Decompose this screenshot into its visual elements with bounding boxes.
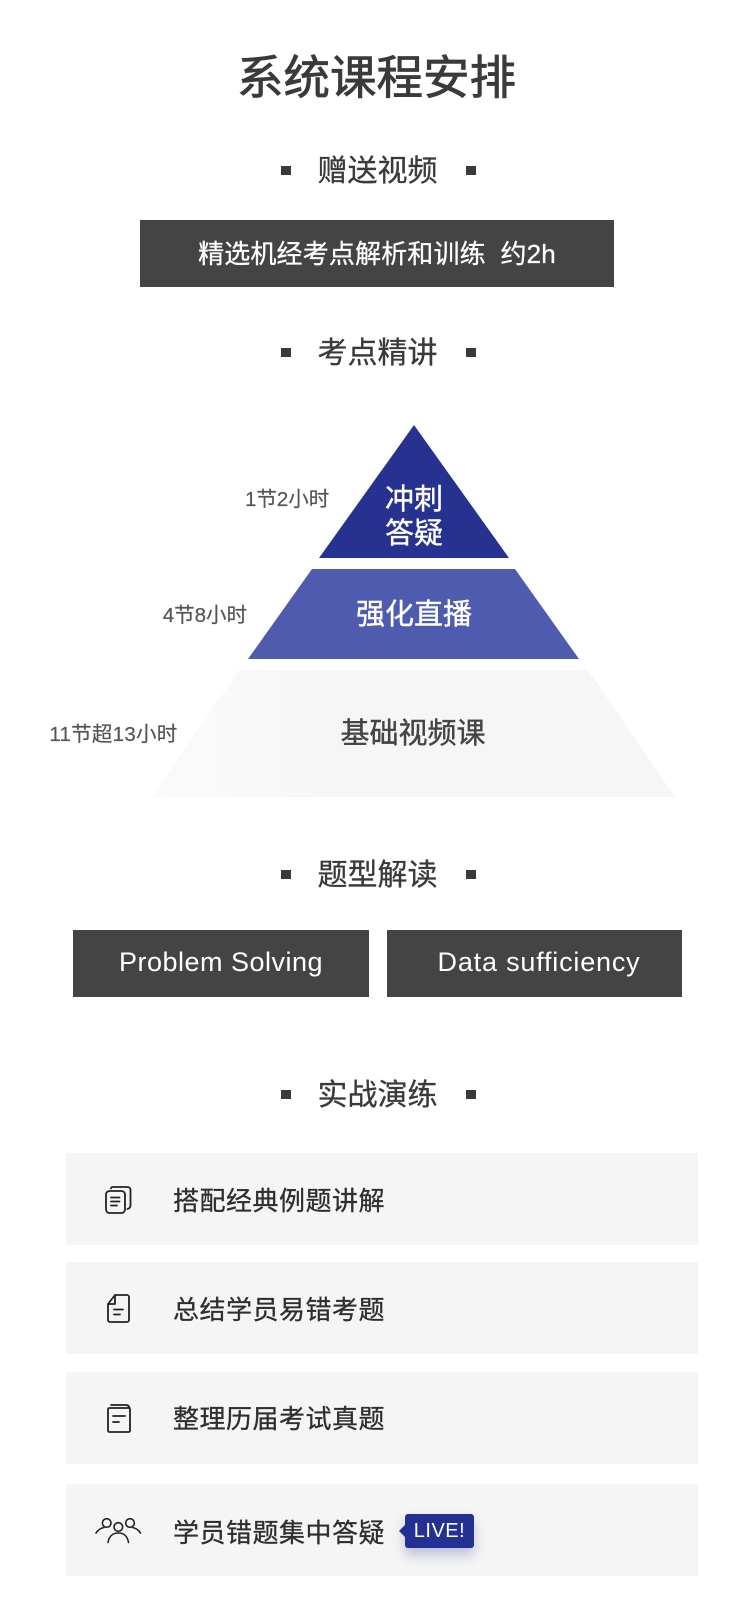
heading: 考点精讲 <box>281 337 476 370</box>
panel: card 2 <box>66 1262 698 1354</box>
panel: card 4 <box>66 1484 698 1576</box>
title: 系统课程安排 <box>237 52 516 104</box>
box: Problem Solving <box>73 930 369 997</box>
heading: 题型解读 <box>281 859 476 892</box>
text: card 2: 总结学员易错考题 <box>173 1295 385 1325</box>
pyramid tier: top <box>319 425 509 558</box>
text: card 4: 学员错题集中答疑 <box>173 1518 385 1548</box>
heading: 实战演练: 实战演练 <box>318 1079 438 1112</box>
icon: people <box>95 1518 142 1544</box>
label: 4节8小时: 4节8小时 <box>163 604 247 627</box>
box: Problem Solving: Problem Solving <box>119 947 323 977</box>
heading: 实战演练 <box>281 1079 476 1112</box>
heading: 赠送视频 <box>281 155 476 188</box>
box: Data sufficiency: Data sufficiency <box>438 947 640 977</box>
panel: card 1 <box>66 1153 698 1245</box>
label: 11节超13小时: 11节超13小时 <box>49 723 178 746</box>
icon: document with folded corner <box>107 1294 130 1323</box>
icon: notebook <box>107 1404 131 1433</box>
icon: documents <box>105 1186 132 1214</box>
tag: LIVE <box>398 1514 480 1562</box>
text: card 1: 搭配经典例题讲解 <box>173 1186 385 1216</box>
banner: gift video <box>140 220 614 287</box>
pyramid tier: middle: 强化直播 <box>356 599 472 631</box>
heading: 赠送视频: 赠送视频 <box>318 155 438 188</box>
pyramid tier: top: 冲刺 <box>385 484 443 516</box>
pyramid <box>49 425 674 797</box>
heading: 考点精讲: 考点精讲 <box>318 337 438 370</box>
heading: 题型解读: 题型解读 <box>318 859 438 892</box>
pyramid tier: top: 答疑 <box>385 518 443 550</box>
banner: gift video: 精选机经考点解析和训练 约2h <box>198 239 556 269</box>
text: card 3: 整理历届考试真题 <box>173 1404 385 1434</box>
box: Data sufficiency <box>387 930 682 997</box>
pyramid tier: base <box>300 670 674 797</box>
pyramid tier: base: 基础视频课 <box>340 718 485 750</box>
pyramid tier: middle <box>248 569 579 659</box>
tag: LIVE: LIVE! <box>414 1520 465 1542</box>
label: 1节2小时: 1节2小时 <box>245 488 329 511</box>
panel: card 3 <box>66 1372 698 1464</box>
